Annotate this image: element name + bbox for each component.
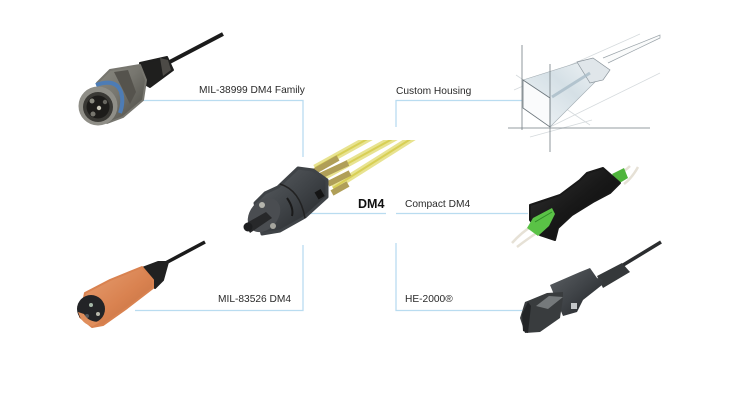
sketch: custom housing [508, 34, 660, 152]
label: HE-2000: HE-2000® [405, 294, 453, 305]
label: Compact DM4: Compact DM4 [405, 199, 470, 210]
photo: Compact DM4 connector [512, 166, 638, 247]
label: MIL-38999 DM4 Family: MIL-38999 DM4 Family [199, 85, 306, 96]
photo: MIL-83526 DM4 connector [77, 242, 205, 327]
label: Custom Housing: Custom Housing [396, 86, 472, 97]
label: DM4: DM4 [358, 197, 384, 211]
photo: MIL-38999 DM4 connector [78, 34, 223, 126]
label: MIL-83526 DM4: MIL-83526 DM4 [218, 294, 291, 305]
connector lines [135, 100, 528, 310]
photo: HE-2000 connector [520, 242, 661, 333]
photo: DM4 central connector [244, 140, 416, 236]
diagram: DM4 connector family [77, 32, 662, 333]
